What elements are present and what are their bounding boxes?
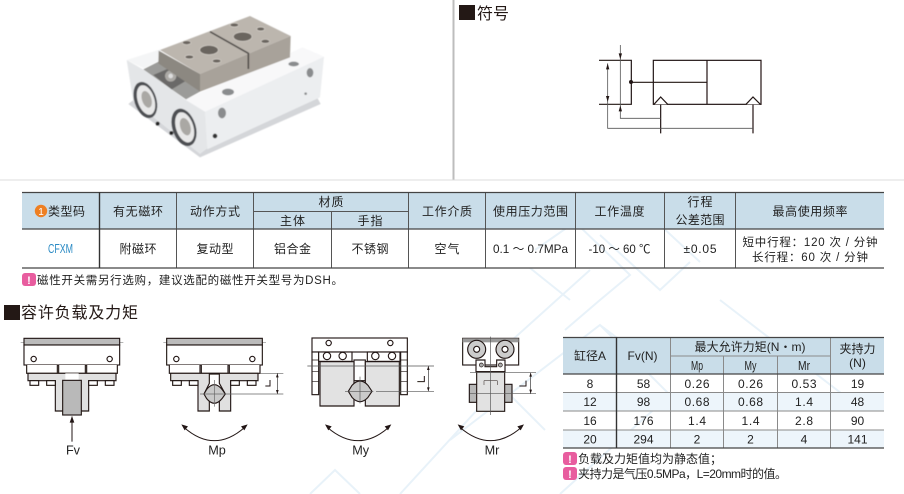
frame dividers <box>0 0 904 180</box>
row 16: 90 <box>851 414 864 428</box>
pressure lines <box>608 45 753 128</box>
diagram My: My <box>352 443 370 457</box>
row 16: 1.4 <box>688 414 706 428</box>
header labels: 类型码 <box>48 204 85 218</box>
row 20 <box>583 432 868 446</box>
row 16: 176 <box>633 414 654 428</box>
note: magnetic switch: 磁性开关需另行选购，建议选配的磁性开关型号为DSH。 <box>37 273 343 287</box>
slider top face <box>160 16 291 74</box>
base plate <box>128 97 321 157</box>
port left <box>129 79 162 121</box>
row 20: 2 <box>747 432 754 446</box>
row 20: 2 <box>694 432 701 446</box>
row 8: 8 <box>587 377 594 391</box>
row values: 不锈钢 <box>352 242 388 256</box>
header labels: 1 <box>38 207 44 218</box>
header labels: My <box>744 358 757 373</box>
row 20: 141 <box>847 432 868 446</box>
channel interior <box>143 60 200 99</box>
slider holes <box>182 23 270 63</box>
diagram Mp <box>163 338 283 457</box>
row values: 长行程：60 次 / 分钟 <box>752 250 868 264</box>
diagram Mp: Mp <box>208 443 226 457</box>
diagram Fv <box>21 338 123 457</box>
heading: symbol: 符号 <box>477 5 509 23</box>
row 12: 0.68 <box>738 395 763 409</box>
row values: 附磁环 <box>120 241 156 256</box>
symbol diagram <box>599 45 761 133</box>
row 8 <box>587 377 864 391</box>
row 20: 20 <box>583 432 597 446</box>
grid <box>563 337 884 448</box>
row values: 空气 <box>434 241 460 256</box>
right rail side face <box>205 57 324 149</box>
diagram Mr <box>458 337 536 457</box>
row 12: 98 <box>637 395 650 409</box>
row 8: 0.26 <box>738 377 763 391</box>
heading: allowable load and moment: 容许负载及力矩 <box>21 304 138 322</box>
slider left face <box>158 51 200 92</box>
row 12: 0.68 <box>684 395 710 409</box>
row 12: 12 <box>583 395 597 409</box>
header labels: (N) <box>849 356 866 370</box>
note: magnetic switch: ! <box>27 275 31 287</box>
diagrams: My and Mr <box>307 337 536 457</box>
row 16: 16 <box>583 414 597 428</box>
header labels: 夹持力 <box>840 341 876 356</box>
row values: -10 ～ 60 ℃ <box>588 242 650 256</box>
note: gripping force: 夹持力是气压0.5MPa，L=20mm时的值。 <box>578 466 787 481</box>
header labels <box>35 194 848 228</box>
header labels: Mr <box>798 358 811 373</box>
rules <box>22 192 884 268</box>
row values <box>48 235 878 264</box>
diagrams: Fv and Mp <box>21 338 283 457</box>
ports <box>654 97 760 104</box>
row values: 铝合金 <box>274 241 311 256</box>
left rail top face <box>127 49 163 68</box>
header labels: 工作温度 <box>594 204 644 218</box>
row 8: 58 <box>637 377 650 391</box>
note: static values: ! <box>568 454 572 466</box>
zebra rows <box>563 392 884 411</box>
header labels: 有无磁环 <box>113 204 163 218</box>
note: gripping force: ! <box>568 469 572 481</box>
row 8: 0.26 <box>684 377 710 391</box>
heading: symbol <box>459 5 509 23</box>
diagram Fv: Fv <box>66 443 81 457</box>
row values: 短中行程：120 次 / 分钟 <box>742 235 878 249</box>
piston <box>631 60 707 104</box>
spec table <box>22 192 884 268</box>
header labels: 手指 <box>358 213 382 228</box>
diagram My <box>307 338 434 457</box>
row values: CFXM <box>48 241 73 256</box>
row 12: 1.4 <box>795 395 813 409</box>
row 12: 48 <box>851 395 864 409</box>
slider gap <box>210 32 248 69</box>
note: static values: 负载及力矩值均为静态值； <box>578 451 722 466</box>
diagram Mr: Mr <box>485 443 499 457</box>
header labels: 动作方式 <box>190 204 240 218</box>
row 16: 2.8 <box>795 414 813 428</box>
header labels: Mp <box>691 358 703 373</box>
header labels <box>574 339 876 373</box>
row 12 <box>583 395 864 409</box>
background watermark <box>310 222 850 494</box>
finger bracket <box>599 60 631 104</box>
row 8: 19 <box>851 377 864 391</box>
header labels: 主体 <box>280 214 305 228</box>
product photo: gripper <box>127 16 324 157</box>
row 16: 1.4 <box>742 414 760 428</box>
header labels: 行程 <box>688 194 712 209</box>
load table <box>563 337 884 448</box>
row 20: 294 <box>633 432 654 446</box>
small holes <box>156 62 313 138</box>
header labels: 最大允许力矩(N・m) <box>694 339 806 354</box>
right rail top face <box>185 47 324 112</box>
header fill <box>563 337 884 374</box>
header fill <box>22 192 884 229</box>
port right <box>167 105 201 149</box>
header labels: 缸径A <box>574 348 606 363</box>
roller <box>153 65 187 89</box>
header labels: Fv(N) <box>628 349 658 363</box>
row 20: 4 <box>801 432 808 446</box>
cylinder body <box>653 60 761 104</box>
row values: ±0.05 <box>684 242 717 256</box>
row 16 <box>583 414 864 428</box>
row values: 复动型 <box>196 242 234 256</box>
header labels: 工作介质 <box>422 204 472 218</box>
header labels: 使用压力范围 <box>493 204 568 218</box>
header labels: 材质 <box>318 195 344 209</box>
header labels: 公差范围 <box>676 213 724 227</box>
grid <box>176 192 736 268</box>
row values: 0.1 ～ 0.7MPa <box>493 242 568 256</box>
row 8: 0.53 <box>792 377 817 391</box>
header labels: 最高使用频率 <box>772 204 848 218</box>
slider right face <box>200 36 291 92</box>
body front face <box>127 60 207 154</box>
